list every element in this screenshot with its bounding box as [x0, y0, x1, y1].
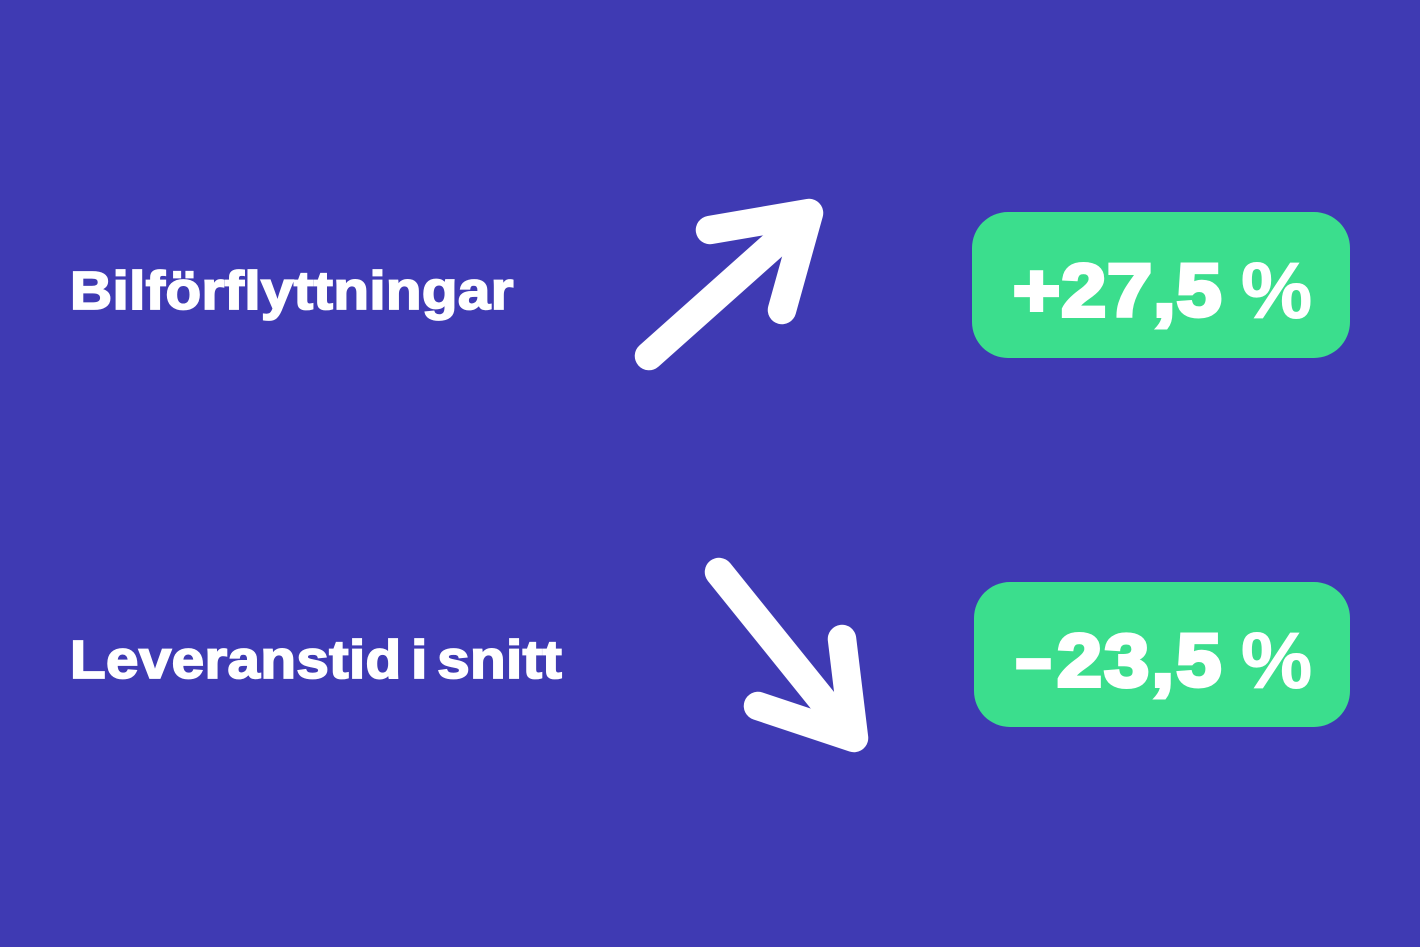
percent sign: % — [1241, 246, 1312, 335]
percent sign: % — [1241, 616, 1312, 705]
label: Leveranstid i snitt: Leveranstid i snitt — [70, 630, 562, 690]
pill: +27,5 % — [972, 212, 1350, 358]
value: 23,5: 23,5 — [1056, 619, 1223, 702]
label: Bilförflyttningar: Bilförflyttningar — [70, 261, 514, 321]
minus sign: – — [1016, 617, 1051, 700]
value: +27,5: +27,5 — [1012, 249, 1222, 332]
pill: –23,5 % — [974, 582, 1350, 727]
arrow: up — [634, 198, 824, 370]
arrow: down — [704, 558, 868, 752]
